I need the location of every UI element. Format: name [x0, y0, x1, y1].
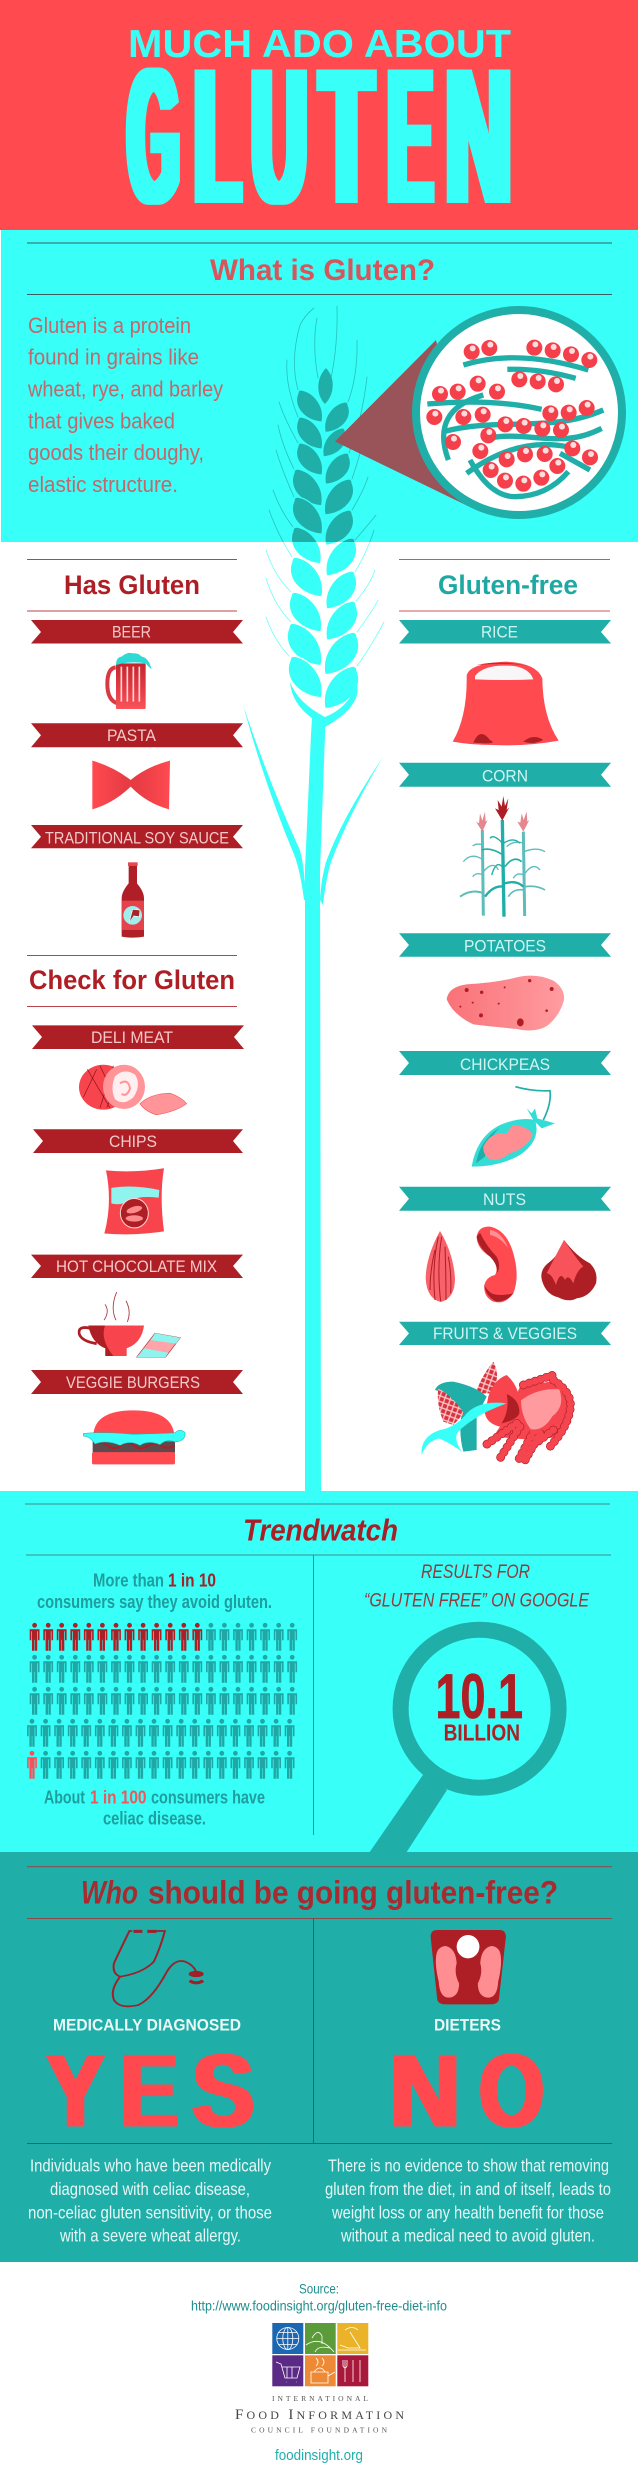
icon: veggie burger	[83, 1410, 185, 1464]
icon: fruits and veggies	[422, 1362, 572, 1463]
text block: results on google: “GLUTEN FREE” ON GOOGLE	[364, 1591, 589, 1612]
banner: corn: CORN	[482, 768, 528, 786]
heading: has gluten: Has Gluten	[64, 570, 200, 600]
panel: what is gluten	[1, 230, 638, 542]
text block: medically diagnosed explanation: with a severe wheat allergy.	[59, 2226, 241, 2246]
text block: 1 in 10 avoid gluten: 1 in 10	[168, 1571, 216, 1591]
banner: pasta: PASTA	[107, 727, 156, 745]
banner: beer: BEER	[112, 624, 151, 642]
banner: nuts: NUTS	[483, 1191, 526, 1209]
banner: potatoes: POTATOES	[464, 938, 546, 956]
icon: hot chocolate cup and packet	[79, 1292, 180, 1357]
icon: soy sauce bottle	[122, 862, 144, 938]
panel: title header	[0, 0, 638, 245]
text block: 1 in 100 celiac disease: 1 in 100	[90, 1787, 146, 1807]
text block: dieters explanation: without a medical need to avoid gluten.	[340, 2226, 595, 2246]
verdict: yes: Y	[46, 2034, 104, 2150]
icon: beer mug	[107, 653, 152, 709]
verdict: no: N	[390, 2034, 460, 2150]
icon: deli meat	[79, 1065, 187, 1115]
panel: who should be going gluten-free	[0, 1852, 638, 2262]
text block: 1 in 100 celiac disease: About	[44, 1787, 85, 1807]
banner: traditional soy sauce: TRADITIONAL SOY SAUCE	[45, 829, 229, 847]
panel: check for gluten	[27, 955, 244, 1464]
icon: rice sack	[453, 662, 559, 745]
text block: dieters explanation	[325, 2156, 611, 2246]
panel: has gluten	[27, 559, 243, 938]
logo: international food information council foundation	[235, 2323, 404, 2435]
icon: almond	[426, 1231, 455, 1302]
icon: magnifying glass	[369, 1630, 559, 1853]
text block: 1 in 10 avoid gluten: consumers say they avoid gluten.	[37, 1592, 272, 1612]
panel: title header: N	[446, 28, 512, 245]
heading: who should be going gluten-free: Who	[81, 1874, 138, 1910]
logo text: international: INTERNATIONAL	[272, 2394, 368, 2403]
text block: results on google: RESULTS FOR	[421, 1562, 530, 1583]
text block: gluten definition: elastic structure.	[28, 472, 178, 497]
label: dieters: DIETERS	[434, 2017, 501, 2035]
icon: potato	[447, 976, 564, 1030]
panel: trendwatch	[0, 1491, 638, 1853]
banner: hot chocolate mix: HOT CHOCOLATE MIX	[56, 1258, 217, 1276]
stat: 10.1 billion	[436, 1662, 523, 1746]
heading: who should be going gluten-free: should be going gluten-free?	[148, 1874, 558, 1910]
banner: potatoes	[399, 933, 611, 957]
banner: hot chocolate mix	[31, 1255, 243, 1278]
text block: 1 in 100 celiac disease: celiac disease.	[103, 1808, 206, 1828]
panel: gluten-free	[399, 559, 611, 1463]
banner: fruits and veggies: FRUITS & VEGGIES	[433, 1325, 577, 1343]
banner: pasta	[31, 723, 243, 747]
text block: gluten definition: goods their doughy,	[28, 440, 204, 465]
stat: 10.1 billion: 10.1	[436, 1662, 523, 1732]
text block: gluten definition: that gives baked	[28, 408, 175, 434]
banner: rice: RICE	[481, 624, 518, 642]
icon: hazelnut	[541, 1240, 597, 1300]
text block: gluten definition	[27, 313, 224, 497]
text block: medically diagnosed explanation: diagnosed with celiac disease,	[50, 2179, 250, 2199]
banner: deli meat: DELI MEAT	[91, 1029, 173, 1047]
source credit: Source:	[299, 2280, 339, 2296]
text block: medically diagnosed explanation: non-celiac gluten sensitivity, or those	[28, 2202, 272, 2222]
banner: fruits and veggies	[399, 1322, 611, 1345]
verdict: no: O	[479, 2034, 544, 2150]
icon: chips bag	[104, 1168, 164, 1234]
text block: 1 in 10 avoid gluten	[37, 1571, 272, 1612]
verdict: yes	[46, 2034, 254, 2150]
text block: 1 in 100 celiac disease: consumers have	[151, 1787, 265, 1807]
icon: wheat stalk	[243, 306, 384, 1492]
icon: chickpea pod	[472, 1087, 555, 1167]
text block: medically diagnosed explanation	[28, 2156, 272, 2246]
logo text: council foundation: COUNCIL FOUNDATION	[251, 2426, 388, 2435]
banner: chips	[33, 1129, 243, 1153]
text block: 1 in 100 celiac disease	[44, 1787, 265, 1828]
icon: stethoscope	[113, 1931, 203, 2006]
text block: results on google	[364, 1562, 589, 1612]
heading: trendwatch: Trendwatch	[243, 1513, 398, 1548]
callout: magnified gluten structure	[335, 310, 622, 515]
logo text: food information: F OOD I NFORMATION	[235, 2407, 404, 2423]
title word: gluten: L	[194, 28, 240, 245]
text block: gluten definition: wheat, rye, and barley	[27, 376, 224, 402]
banner: deli meat	[32, 1025, 244, 1049]
icon: corn stalks	[460, 796, 545, 917]
website link: foodinsight.org	[275, 2447, 363, 2464]
icon: bow-tie pasta	[92, 761, 170, 809]
title word: gluten	[128, 28, 512, 245]
banner: beer	[31, 620, 243, 644]
text block: gluten definition: Gluten is a protein	[28, 313, 191, 338]
verdict: yes: S	[192, 2034, 254, 2150]
heading: check for gluten: Check for Gluten	[29, 965, 235, 995]
heading: gluten-free: Gluten-free	[438, 570, 578, 600]
banner: nuts	[399, 1187, 611, 1211]
stat: 10.1 billion: BILLION	[444, 1720, 520, 1746]
title word: gluten: T	[320, 28, 373, 245]
banner: rice	[399, 620, 611, 644]
banner: veggie burgers: VEGGIE BURGERS	[66, 1374, 200, 1392]
verdict: no	[390, 2034, 544, 2150]
banner: chickpeas	[399, 1051, 611, 1075]
verdict: yes: E	[120, 2034, 178, 2150]
label: medically diagnosed: MEDICALLY DIAGNOSED	[53, 2017, 241, 2035]
title line: much ado about: MUCH ADO ABOUT	[128, 23, 511, 66]
text block: 1 in 10 avoid gluten: More than	[93, 1571, 164, 1591]
icon: bathroom scale	[431, 1930, 506, 2004]
banner: veggie burgers	[31, 1370, 243, 1394]
chart: people pictogram	[27, 1623, 297, 1779]
text block: medically diagnosed explanation: Individuals who have been medically	[30, 2156, 271, 2176]
heading: what is gluten: What is Gluten?	[210, 254, 435, 287]
icon: cashew	[477, 1227, 517, 1302]
source credit: http://www.foodinsight.org/gluten-free-diet-info	[191, 2298, 447, 2314]
title word: gluten: G	[128, 28, 179, 245]
banner: chips: CHIPS	[109, 1133, 157, 1151]
text block: gluten definition: found in grains like	[28, 344, 199, 370]
title word: gluten: E	[388, 28, 432, 245]
banner: chickpeas: CHICKPEAS	[460, 1056, 550, 1074]
title word: gluten: U	[252, 28, 307, 245]
source credit	[191, 2280, 447, 2314]
banner: corn	[399, 763, 611, 787]
